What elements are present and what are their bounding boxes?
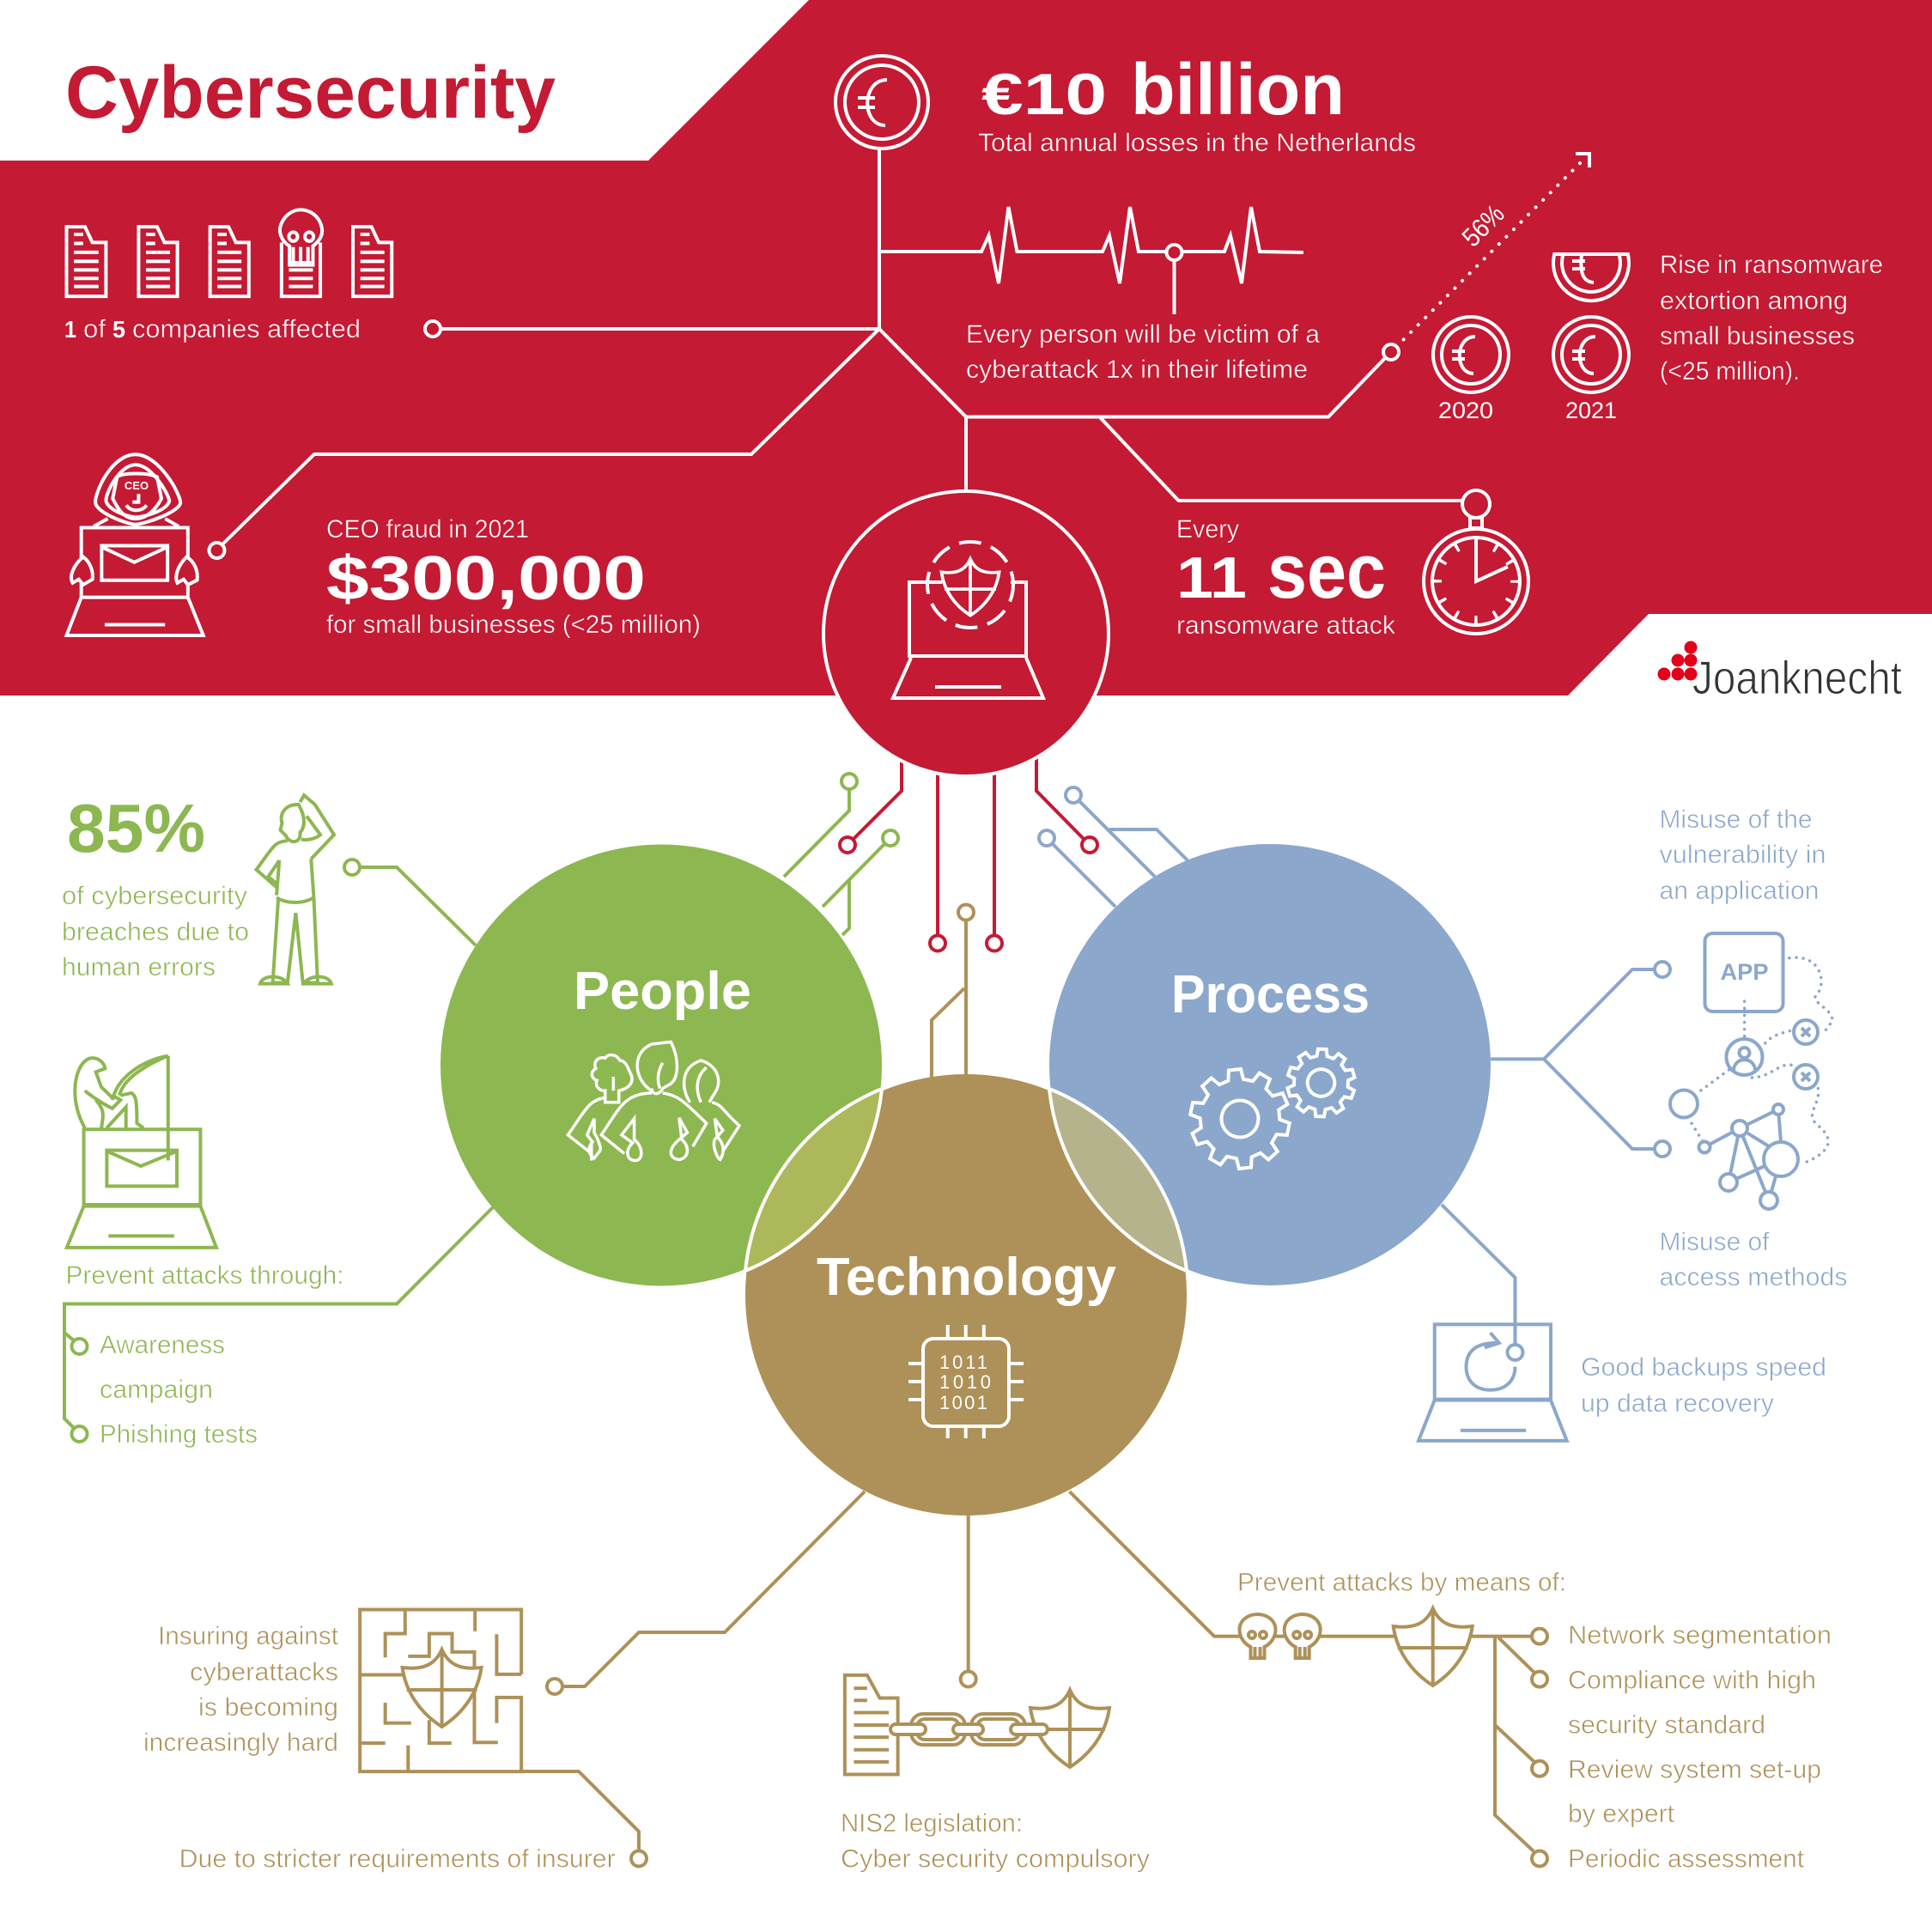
icon: maze with shield: [360, 1609, 521, 1771]
text: heartbeat caption: Every person will be victim of a: [966, 320, 1320, 349]
green: prevention list: Phishing tests: [100, 1420, 258, 1449]
tan: insurance text: increasingly hard: [143, 1728, 338, 1757]
label: 56 percent rise: 56%: [1456, 198, 1510, 252]
tan: insurance text: is becoming: [198, 1693, 338, 1722]
text: 1 of 5 companies affected: of: [83, 315, 106, 343]
tan: insurance text: [143, 1622, 339, 1757]
icon: app and network: APP: [1721, 959, 1769, 985]
text: ransomware rise: [1660, 251, 1883, 386]
text: heartbeat caption: [966, 320, 1320, 384]
text: every 11 sec: Every: [1176, 515, 1239, 544]
tan: NIS2 text: NIS2 legislation:: [841, 1809, 1023, 1838]
circuit traces: green: [784, 774, 898, 935]
tan: NIS2 text: [841, 1809, 1150, 1874]
icon: two skulls: [1240, 1614, 1321, 1658]
text: every 11 sec: sec: [1267, 529, 1386, 615]
circuit traces: red: [840, 758, 1097, 951]
label: 2021: 2021: [1565, 398, 1617, 423]
tan: prevention measures list: Periodic assessment: [1568, 1844, 1805, 1874]
dotted network connections: [1692, 957, 1832, 1164]
text: CEO fraud: for small businesses (<25 million): [326, 611, 701, 639]
text: 1 of 5 companies affected: 1: [64, 316, 76, 343]
text: every 11 sec: ransomware attack: [1176, 611, 1396, 640]
label: 2020: 2020: [1438, 398, 1493, 423]
tan: insurance text: Insuring against: [158, 1622, 339, 1650]
text: every 11 sec: [1176, 515, 1396, 640]
icon: 2020 coin: [1433, 317, 1509, 392]
connector: confused person to people: [344, 860, 476, 945]
icon: laptop with shield: [893, 542, 1043, 698]
icon: confused person: [256, 795, 334, 984]
connector: technology to prevention list: [1070, 1492, 1547, 1867]
label: CEO on hacker forehead: CEO: [125, 479, 149, 492]
green: prevention list: [100, 1331, 258, 1449]
icon row: five documents: [66, 210, 392, 296]
text: ransomware rise: Rise in ransomware: [1660, 251, 1883, 279]
connector: prevent attacks list: [64, 1207, 493, 1442]
venn: technology circle: [745, 1074, 1187, 1516]
text: every 11 sec: 11: [1176, 545, 1247, 611]
icon: gears: [1182, 1040, 1364, 1177]
text: ransomware rise: small businesses: [1660, 322, 1855, 350]
blue: vulnerability text: Misuse of the: [1659, 805, 1812, 834]
connector: process to backup: [1442, 1205, 1523, 1360]
connector: maze to insurer note: [521, 1771, 647, 1867]
heading: Process: Process: [1171, 965, 1370, 1024]
blue: vulnerability text: an application: [1659, 877, 1819, 905]
icon: binary chip: 1011: [939, 1352, 987, 1373]
icon: app and network: [1670, 933, 1818, 1209]
blue: access methods text: [1659, 1228, 1848, 1291]
logo: Joanknecht: [1657, 641, 1902, 704]
venn overlap: people and technology: [745, 1089, 882, 1271]
green: prevent attacks through: Prevent attacks through:: [65, 1261, 343, 1290]
heading: total losses figure: billion: [1131, 49, 1345, 130]
tan: prevention measures list: security standard: [1568, 1710, 1765, 1740]
text: CEO fraud: $300,000: [326, 544, 646, 613]
venn: people circle: [440, 845, 882, 1286]
tan: prevention measures list: Review system set-up: [1568, 1755, 1821, 1784]
connector end rings: [210, 245, 1399, 558]
venn overlap: process and technology: [1049, 1089, 1187, 1271]
panel: red header band: [0, 0, 1932, 696]
heading: total losses figure: [981, 49, 1345, 130]
green: prevention list: Awareness: [100, 1331, 225, 1359]
connector: technology to NIS2: [961, 1516, 976, 1686]
icon: three people: [568, 1042, 739, 1161]
icon: backup laptop: [1419, 1324, 1567, 1441]
text: heartbeat caption: cyberattack 1x in their lifetime: [966, 355, 1308, 384]
icon: binary chip: 1010: [939, 1371, 991, 1393]
tan: prevention measures list: Compliance with high: [1568, 1666, 1816, 1695]
blue: backup text: up data recovery: [1581, 1389, 1774, 1418]
tan: prevent attacks heading: Prevent attacks by means of:: [1237, 1568, 1566, 1597]
tan: insurer requirements text: Due to stricter requirements of insurer: [179, 1844, 616, 1874]
blue: vulnerability text: [1659, 805, 1826, 905]
green: human errors text: human errors: [62, 953, 216, 981]
tan: prevention measures list: Network segmentation: [1568, 1621, 1832, 1649]
green: human errors text: breaches due to: [62, 918, 249, 946]
green: 85 percent figure: 85%: [67, 790, 205, 866]
tan: NIS2 text: Cyber security compulsory: [841, 1844, 1150, 1874]
blue: access methods text: Misuse of: [1659, 1228, 1770, 1256]
icon: stopwatch: [1424, 490, 1528, 634]
tan: prevention measures list: [1568, 1621, 1832, 1874]
text: 1 of 5 companies affected: 5: [112, 316, 125, 343]
blue: vulnerability text: vulnerability in: [1659, 841, 1826, 869]
heading: total losses figure: €10: [981, 62, 1107, 127]
connector lines in header: [222, 149, 1589, 544]
tan: prevention measures list: by expert: [1568, 1800, 1675, 1828]
connector: technology to insurance: [547, 1492, 865, 1694]
green: prevention list: campaign: [100, 1376, 213, 1404]
icon: CEO hacker with laptop: [66, 454, 204, 635]
circuit traces: tan: [932, 905, 974, 1078]
text: CEO fraud: [326, 515, 701, 639]
title: Cybersecurity: [65, 52, 556, 134]
green: human errors text: of cybersecurity: [62, 882, 247, 910]
blue: access methods text: access methods: [1659, 1263, 1848, 1291]
text: total losses caption: Total annual losses in the Netherlands: [978, 129, 1416, 157]
heading: People: People: [574, 962, 751, 1021]
circuit traces: blue: [1039, 787, 1188, 907]
icon: 2021 coin: [1553, 317, 1629, 392]
connector: process branches: [1491, 962, 1670, 1157]
text: ransomware rise: extortion among: [1660, 287, 1848, 315]
heading: Technology: Technology: [817, 1248, 1117, 1307]
icon: binary chip: 1001: [939, 1392, 987, 1413]
panel: central circle: [823, 491, 1109, 776]
green: human errors text: [62, 882, 249, 981]
icon: half euro coin: [1553, 254, 1629, 301]
icon: phishing on laptop: [67, 1056, 216, 1248]
icon: euro coin: [835, 56, 928, 149]
text: ransomware rise: (<25 million).: [1660, 357, 1800, 386]
blue: backup text: Good backups speed: [1581, 1353, 1826, 1382]
logo: Joanknecht: Joanknecht: [1692, 651, 1902, 704]
icon: binary chip: [908, 1325, 1024, 1438]
tan: insurance text: cyberattacks: [190, 1658, 338, 1686]
icon: shield: [1394, 1608, 1473, 1686]
icon: document chained to shield: [845, 1675, 1109, 1774]
venn: process circle: [1049, 844, 1491, 1285]
blue: backup text: [1581, 1353, 1826, 1418]
text: 1 of 5 companies affected: companies affected: [132, 315, 361, 343]
text: CEO fraud: CEO fraud in 2021: [326, 515, 529, 544]
